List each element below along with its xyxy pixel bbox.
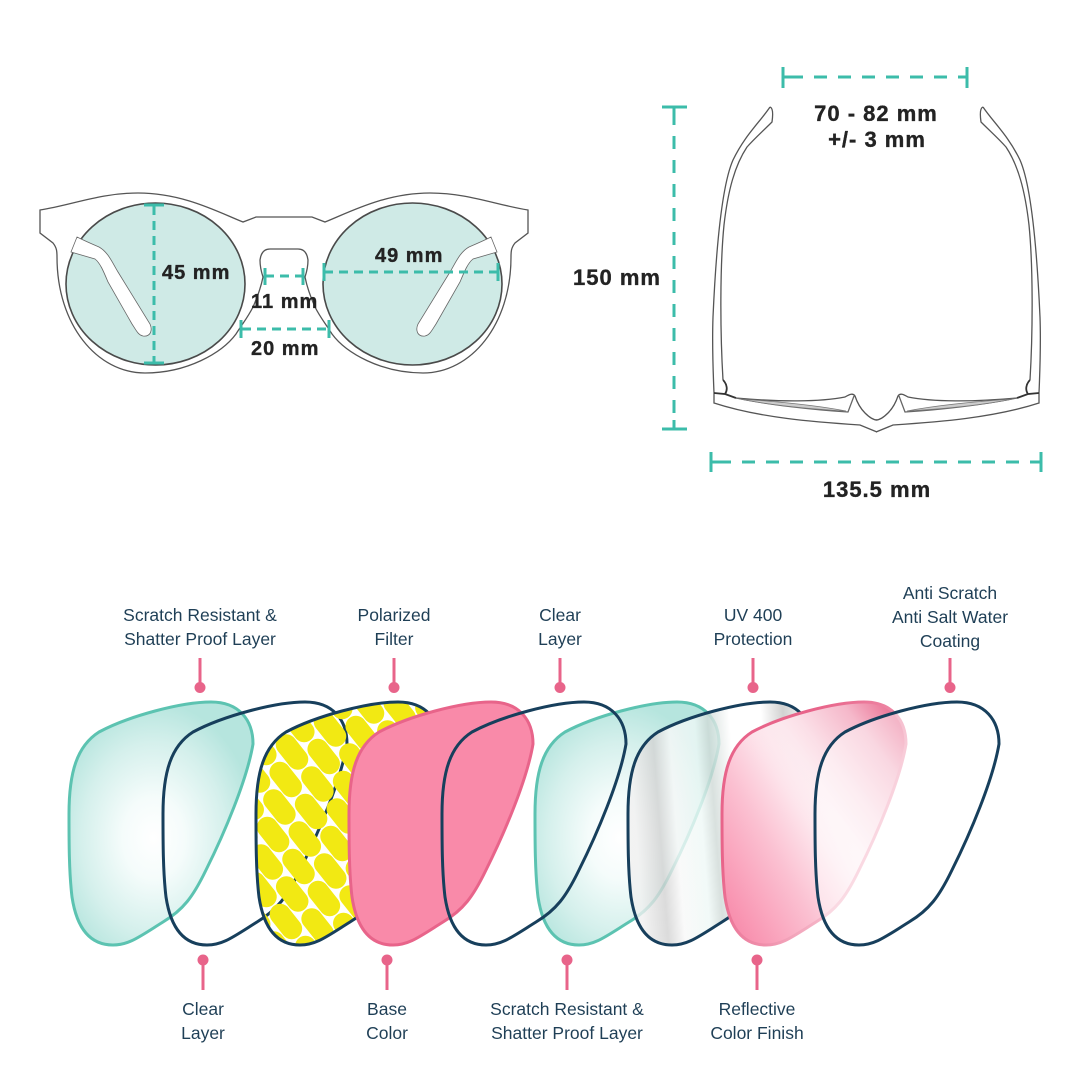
right lens bbox=[323, 203, 502, 365]
lens 3: polarized filter bbox=[254, 700, 429, 946]
label: base color: Base bbox=[367, 999, 407, 1019]
label: scratch resistant and shatter proof layer, bottom bbox=[490, 954, 644, 1043]
front view of sunglasses with measurements bbox=[40, 193, 528, 373]
label: reflective color finish: Color Finish bbox=[710, 1023, 804, 1043]
lens 2: clear layer bbox=[163, 702, 347, 945]
label: clear layer, top bbox=[538, 605, 582, 693]
dimension: 150 mm length: 150 mm bbox=[573, 265, 661, 290]
label: anti scratch anti salt water coating: Anti Salt Water bbox=[892, 607, 1008, 627]
dimension: 135.5 mm width bbox=[711, 452, 1041, 502]
lens 8: reflective color finish bbox=[722, 702, 906, 945]
right temple arm bbox=[417, 237, 497, 336]
label: clear layer, bottom: Clear bbox=[182, 999, 224, 1019]
dimension: 11 mm bridge: 11 mm bbox=[251, 291, 318, 313]
dimension: 45 mm lens height: 45 mm bbox=[162, 262, 230, 284]
left lens bbox=[66, 203, 245, 365]
lens 6: clear layer bbox=[442, 702, 626, 945]
dimension: 20 mm bridge: 20 mm bbox=[251, 338, 319, 360]
lens 4: base color bbox=[349, 702, 533, 945]
label: polarized filter bbox=[358, 605, 430, 693]
label: clear layer, top: Clear bbox=[539, 605, 581, 625]
label: anti scratch anti salt water coating: Anti Scratch bbox=[903, 583, 997, 603]
label: UV 400 protection: Protection bbox=[714, 629, 792, 649]
dimension: 70 - 82 mm temple gap: 70 - 82 mm bbox=[814, 101, 938, 126]
frame outline bbox=[40, 193, 528, 373]
left temple arm bbox=[71, 237, 151, 336]
dimension: 11 mm bridge bbox=[251, 268, 318, 313]
dimension: 70 - 82 mm temple gap bbox=[783, 67, 967, 152]
lens 1: scratch resistant layer bbox=[69, 702, 253, 945]
top view of sunglasses with measurements bbox=[573, 67, 1041, 502]
label: clear layer, bottom: Layer bbox=[181, 1023, 225, 1043]
dimension: 49 mm lens width: 49 mm bbox=[375, 245, 443, 267]
label: clear layer, bottom bbox=[181, 954, 225, 1043]
label: scratch resistant and shatter proof layer, top: Scratch Resistant & bbox=[123, 605, 277, 625]
lens 9: anti scratch coating bbox=[815, 702, 999, 945]
label: scratch resistant and shatter proof layer, top bbox=[123, 605, 277, 693]
label: reflective color finish bbox=[710, 954, 804, 1043]
dimension: 70 - 82 mm temple gap: +/- 3 mm bbox=[828, 127, 926, 152]
dimension: 135.5 mm width: 135.5 mm bbox=[823, 477, 931, 502]
label: reflective color finish: Reflective bbox=[719, 999, 795, 1019]
dimension: 45 mm lens height bbox=[144, 205, 230, 363]
label: anti scratch anti salt water coating: Coating bbox=[920, 631, 980, 651]
label: scratch resistant and shatter proof layer, top: Shatter Proof Layer bbox=[124, 629, 276, 649]
dimension: 20 mm bridge bbox=[241, 320, 329, 360]
dimension: 49 mm lens width bbox=[324, 245, 498, 281]
lens 7: UV 400 protection bbox=[628, 702, 812, 945]
label: scratch resistant and shatter proof layer, bottom: Scratch Resistant & bbox=[490, 999, 644, 1019]
top view frame outline bbox=[713, 107, 1040, 432]
label: UV 400 protection: UV 400 bbox=[724, 605, 782, 625]
lens layer stack bbox=[68, 700, 1000, 946]
label: polarized filter: Polarized bbox=[358, 605, 430, 625]
label: scratch resistant and shatter proof layer, bottom: Shatter Proof Layer bbox=[491, 1023, 643, 1043]
label: polarized filter: Filter bbox=[375, 629, 414, 649]
label: clear layer, top: Layer bbox=[538, 629, 582, 649]
label: base color: Color bbox=[366, 1023, 408, 1043]
dimension: 150 mm length bbox=[573, 107, 687, 429]
label: anti scratch anti salt water coating bbox=[892, 583, 1008, 693]
label: base color bbox=[366, 954, 408, 1043]
label: UV 400 protection bbox=[714, 605, 792, 693]
lens 5: scratch resistant layer bbox=[535, 702, 719, 945]
